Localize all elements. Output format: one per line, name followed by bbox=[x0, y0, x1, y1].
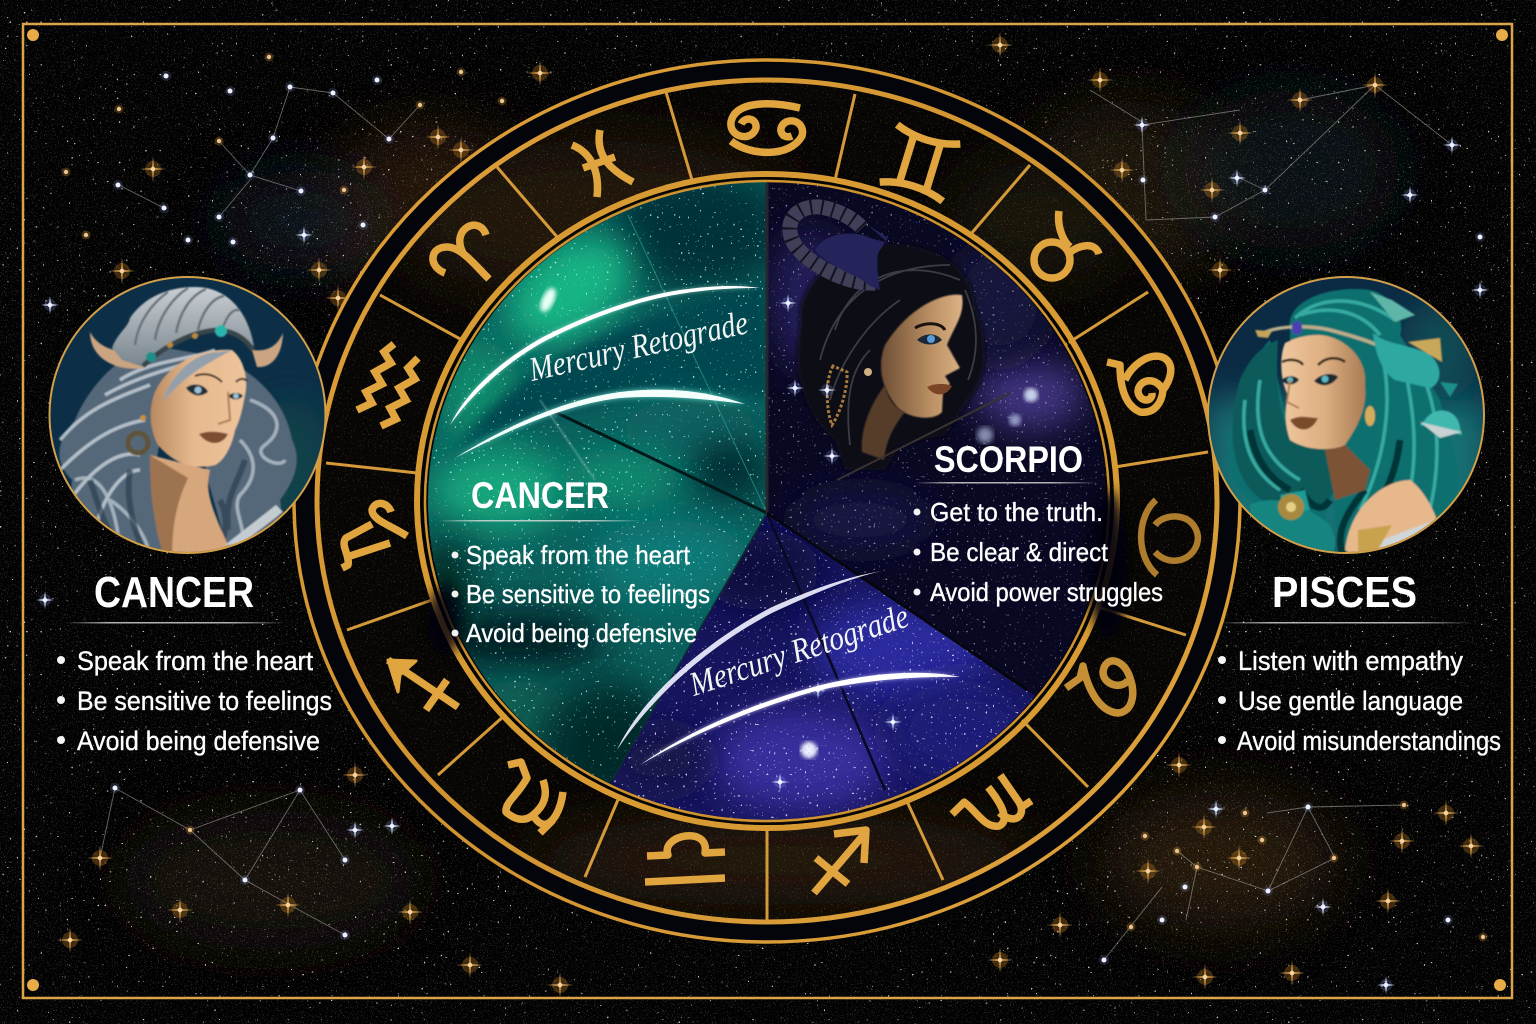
panel: scorpio wedge bbox=[767, 182, 1106, 696]
face bbox=[151, 350, 246, 467]
flower bbox=[1250, 500, 1336, 552]
label: mercury retrograde teal: Mercury Retograde bbox=[525, 304, 751, 389]
panel: blue wedge bbox=[610, 514, 1035, 820]
text block: wheel scorpio: Get to the truth. bbox=[930, 497, 1103, 527]
glyph: leo bbox=[1107, 356, 1171, 412]
glyph: sagittarius left bbox=[388, 660, 458, 710]
glyph: virgo bottom bbox=[506, 762, 563, 833]
blade bbox=[225, 505, 283, 545]
tiara bbox=[1264, 324, 1376, 348]
glyph: gemini bbox=[880, 125, 960, 201]
text block: right pisces bbox=[1218, 568, 1501, 756]
shadow behind wheel text bbox=[427, 490, 1128, 655]
inner gold rings bbox=[417, 174, 1117, 828]
shoulder bbox=[1345, 480, 1440, 560]
tiara bbox=[143, 330, 253, 366]
text block: right pisces: PISCES bbox=[1272, 568, 1417, 617]
text block: left cancer: CANCER bbox=[94, 568, 254, 617]
portrait: scorpio woman bbox=[790, 207, 985, 470]
swoosh: teal arcs bbox=[450, 286, 760, 458]
text block: right pisces: Listen with empathy bbox=[1238, 646, 1463, 676]
fish bbox=[1373, 333, 1439, 388]
text block: wheel scorpio: SCORPIO bbox=[934, 439, 1083, 480]
glyph: pisces bbox=[572, 130, 633, 197]
glyph: taurus bbox=[1034, 211, 1099, 278]
shell headdress bbox=[112, 287, 254, 367]
label: mercury retrograde blue: Mercury Retograde bbox=[684, 598, 913, 704]
text block: right pisces: Use gentle language bbox=[1238, 686, 1463, 716]
text block: wheel cancer: Be sensitive to feelings bbox=[466, 579, 710, 609]
zodiac wheel bbox=[294, 60, 1240, 942]
glyph: cancer top bbox=[731, 104, 803, 152]
glyph: sagittarius bottom bbox=[814, 830, 866, 893]
face bbox=[1325, 445, 1370, 500]
glyph: cancer right bbox=[1141, 500, 1198, 575]
ring spokes bbox=[326, 92, 1208, 922]
portrait: cancer bbox=[50, 277, 335, 560]
center divider lines bbox=[612, 183, 1027, 780]
panel: central wedges bbox=[428, 182, 1106, 820]
earring bbox=[128, 433, 148, 453]
text block: wheel scorpio bbox=[914, 439, 1163, 607]
earring bbox=[1365, 406, 1375, 426]
text block: wheel cancer bbox=[438, 475, 710, 648]
swoosh: blue arcs bbox=[617, 571, 960, 765]
hair bbox=[1229, 289, 1458, 560]
text block: wheel cancer: Avoid being defensive bbox=[466, 618, 697, 648]
text block: left cancer: Avoid being defensive bbox=[77, 726, 320, 756]
glyph: scorpio bbox=[946, 768, 1035, 842]
horns bbox=[90, 332, 145, 369]
glyph: aries bbox=[433, 225, 489, 279]
panel: teal wedge bbox=[428, 182, 767, 784]
glyph: capricorn right bbox=[1066, 661, 1133, 713]
portrait: pisces bbox=[1205, 277, 1490, 560]
text block: left cancer: Speak from the heart bbox=[77, 646, 313, 676]
glyph: aquarius bbox=[357, 344, 418, 426]
constellation lines bbox=[100, 85, 1452, 960]
neck and chest bbox=[150, 455, 228, 560]
hair bbox=[59, 345, 297, 560]
text block: wheel cancer: CANCER bbox=[471, 475, 609, 516]
text block: wheel scorpio: Be clear & direct bbox=[930, 537, 1109, 567]
text block: wheel cancer: Speak from the heart bbox=[466, 540, 691, 570]
glyph: capricorn left bbox=[342, 503, 407, 568]
text block: left cancer bbox=[57, 568, 332, 756]
horn: scorpion tail bbox=[790, 207, 877, 283]
text block: right pisces: Avoid misunderstandings bbox=[1237, 726, 1501, 756]
jellyfish bbox=[1420, 411, 1462, 435]
text block: left cancer: Be sensitive to feelings bbox=[77, 686, 332, 716]
glyph: libra bbox=[645, 836, 725, 882]
text block: wheel scorpio: Avoid power struggles bbox=[930, 577, 1163, 607]
